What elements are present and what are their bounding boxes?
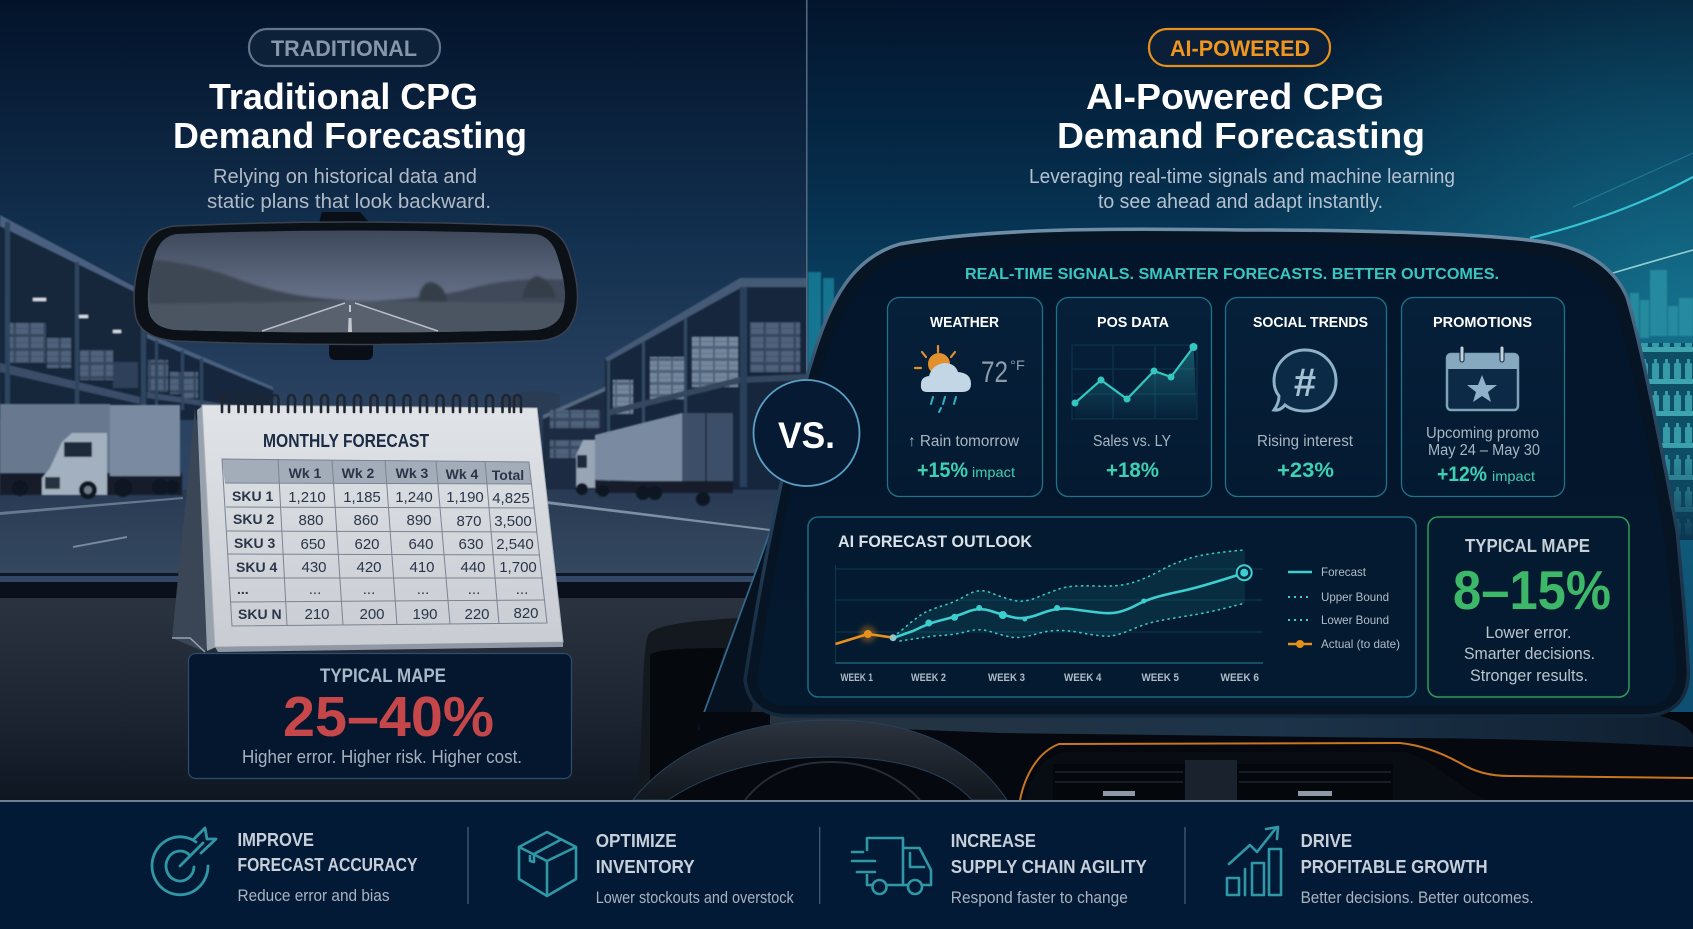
heading: AI-powered [1057, 76, 1425, 156]
panel: social trends card: +23% [1277, 459, 1334, 482]
icon: cardboard box [519, 832, 576, 896]
panel: AI forecast outlook chart: AI FORECAST OUTLOOK [838, 532, 1033, 551]
forecast table: 190 [412, 606, 438, 623]
panel: promotions card [1402, 298, 1564, 496]
spiral rings [222, 395, 521, 412]
forecast table: 440 [460, 559, 486, 576]
callout: traditional MAPE: TYPICAL MAPE [320, 666, 446, 687]
forecast table: ... [516, 581, 528, 598]
windshield pillar [697, 293, 862, 735]
heading: traditional [173, 76, 527, 156]
forecast table: 220 [464, 606, 490, 623]
icon: desk calendar [172, 395, 563, 652]
chart legend: Lower Bound [1321, 613, 1389, 627]
icon: growth bars with arrow [1227, 827, 1281, 895]
forecast table: ... [309, 581, 321, 598]
week labels: WEEK 2 [911, 672, 946, 684]
forecast table: 200 [359, 606, 385, 623]
heading: AI-powered: AI-Powered CPG [1086, 76, 1384, 117]
panel: screen bezel [745, 229, 1688, 716]
badge: AI-powered [1149, 29, 1330, 66]
benefit: improve forecast accuracy: Reduce error and bias [238, 887, 390, 905]
benefit: optimize inventory: INVENTORY [596, 857, 695, 877]
badge: VS [754, 380, 860, 486]
week labels: WEEK 5 [1142, 672, 1179, 684]
panel: traditional background scene [0, 0, 807, 800]
panel: promotions card: +12% [1437, 463, 1487, 486]
chart legend [1288, 565, 1400, 651]
heading: traditional: Demand Forecasting [173, 115, 527, 156]
text block: AI-powered header [1029, 29, 1455, 213]
forecast line [893, 565, 1252, 638]
text block: traditional header [173, 29, 527, 213]
icon: rearview mirror [134, 212, 578, 360]
callout: AI MAPE: Lower error. [1486, 623, 1572, 642]
forecast table: 620 [354, 536, 380, 553]
city skyline [808, 270, 1693, 372]
icon: target with arrow [152, 828, 216, 895]
panel: benefits strip [0, 800, 1693, 929]
subtitle: AI-powered: Leveraging real-time signals and machine learning [1029, 166, 1455, 188]
benefit: improve forecast accuracy [152, 828, 417, 905]
forecast table: 630 [458, 536, 484, 553]
forecast table: 1,185 [343, 489, 381, 506]
panel: weather card: °F [1010, 357, 1025, 373]
benefit: drive profitable growth: DRIVE [1301, 831, 1352, 851]
forecast table: SKU 2 [233, 511, 274, 527]
forecast table: 880 [298, 512, 324, 529]
panel: promotions card: Upcoming promo [1426, 425, 1539, 442]
divider line between panels [806, 0, 808, 380]
callout: AI MAPE: Smarter decisions. [1464, 644, 1595, 663]
panel: POS data card: POS DATA [1097, 314, 1169, 331]
benefit: increase supply chain agility: SUPPLY CHAIN AGILITY [951, 857, 1147, 877]
forecast table: Wk 1 [289, 465, 322, 481]
badge: AI-powered: AI-POWERED [1170, 36, 1310, 61]
benefit: optimize inventory: Lower stockouts and overstock [596, 889, 794, 907]
forecast table: 420 [356, 559, 382, 576]
forecast table: SKU 3 [234, 535, 275, 551]
forecast table: 3,500 [494, 513, 532, 530]
store shelves [1636, 343, 1693, 540]
forecast table [222, 459, 547, 626]
panel: promotions card: PROMOTIONS [1433, 314, 1532, 331]
actual line [836, 626, 897, 644]
chart: POS sales [1072, 343, 1198, 419]
benefit: drive profitable growth: PROFITABLE GROWTH [1301, 857, 1488, 877]
wiper and dashboard [0, 573, 807, 576]
callout: AI MAPE: TYPICAL MAPE [1465, 536, 1590, 556]
forecast table: 820 [513, 605, 539, 622]
chart legend: Forecast [1321, 565, 1367, 579]
forecast table: 650 [300, 536, 326, 553]
calendar stand [172, 405, 216, 652]
subtitle: traditional: Relying on historical data and [213, 166, 477, 188]
air vents [1026, 752, 1485, 800]
subtitle: AI-powered: to see ahead and adapt instantly. [1098, 191, 1383, 213]
forecast table: 1,190 [446, 489, 484, 506]
left warehouse [0, 215, 275, 420]
week labels: WEEK 1 [840, 672, 873, 684]
chart legend: Actual (to date) [1321, 637, 1400, 651]
callout: AI MAPE: 8–15% [1453, 559, 1611, 621]
forecast table: ... [363, 581, 375, 598]
forecast table: 890 [406, 512, 432, 529]
badge: traditional: TRADITIONAL [271, 36, 417, 61]
forecast table: 430 [301, 559, 327, 576]
forecast table: ... [417, 581, 429, 598]
panel: promotions card: May 24 – May 30 [1428, 442, 1540, 459]
forecast table: SKU N [238, 606, 282, 622]
panel: AI forecast outlook chart [808, 517, 1416, 697]
benefit: optimize inventory: OPTIMIZE [596, 831, 677, 851]
week labels: WEEK 4 [1064, 672, 1102, 684]
benefit: increase supply chain agility: INCREASE [951, 831, 1036, 851]
left truck [0, 404, 182, 499]
forecast table: 640 [408, 536, 434, 553]
week labels: WEEK 6 [1220, 672, 1259, 684]
confidence band [893, 550, 1245, 641]
orange trim [1020, 743, 1693, 800]
callout: AI MAPE: Stronger results. [1470, 666, 1588, 685]
calendar page [202, 405, 563, 647]
forecast table: Total [492, 467, 524, 483]
panel: POS data card [1056, 298, 1212, 496]
week labels: WEEK 3 [988, 672, 1025, 684]
calendar heading: MONTHLY FORECAST [263, 431, 429, 451]
panel: weather card: impact [972, 464, 1015, 480]
tagline: REAL-TIME SIGNALS. SMARTER FORECASTS. BETTER OUTCOMES. [965, 266, 1499, 283]
forecast table: 1,700 [499, 559, 537, 576]
forecast table: SKU 4 [236, 559, 277, 575]
benefit: improve forecast accuracy: FORECAST ACCURACY [238, 855, 418, 875]
subtitle: traditional: static plans that look backward. [207, 191, 491, 213]
subtitle: AI-powered [1029, 166, 1455, 213]
benefit: increase supply chain agility: Respond faster to change [951, 889, 1128, 907]
panel: promotions card: impact [1492, 468, 1535, 484]
icon: delivery truck [852, 838, 931, 894]
upper bound line [893, 550, 1245, 637]
forecast table: 1,210 [288, 489, 326, 506]
callout: traditional MAPE [188, 654, 572, 778]
benefit: increase supply chain agility [852, 831, 1147, 907]
temperature: 72 [981, 356, 1008, 389]
forecast table: ... [468, 581, 480, 598]
heading: AI-powered: Demand Forecasting [1057, 115, 1425, 156]
benefit: drive profitable growth [1227, 827, 1534, 907]
panel: social trends card: Rising interest [1257, 433, 1354, 450]
forecast table: SKU 1 [232, 488, 273, 504]
top right light trails [1530, 153, 1693, 273]
road [0, 490, 807, 574]
forecast table: 410 [409, 559, 435, 576]
panel: POS data card: +18% [1106, 459, 1159, 482]
forecast table: Wk 4 [446, 466, 479, 482]
week labels [840, 672, 1259, 684]
dashboard right [700, 712, 1693, 800]
badge: VS: VS. [778, 415, 835, 456]
callout: AI MAPE [1428, 517, 1629, 697]
forecast table: Wk 3 [396, 465, 429, 481]
panel: weather card: WEATHER [930, 314, 999, 331]
callout: traditional MAPE: Higher error. Higher risk. Higher cost. [242, 746, 522, 767]
benefit: drive profitable growth: Better decisions. Better outcomes. [1301, 889, 1534, 907]
forecast table: 1,240 [395, 489, 433, 506]
right warehouses [543, 278, 807, 490]
benefit: optimize inventory [519, 831, 794, 907]
panel: weather card: +15% [917, 459, 968, 482]
forecast table: 870 [456, 513, 482, 530]
panel: weather card [888, 298, 1042, 496]
mirror glass scene [148, 230, 565, 332]
lower bound line [900, 603, 1245, 641]
icon: promo calendar with star [1447, 346, 1518, 410]
badge: traditional [249, 29, 440, 66]
panel: POS data card: Sales vs. LY [1093, 433, 1171, 450]
heading: traditional: Traditional CPG [209, 76, 478, 117]
icon: hashtag speech bubble: # [1294, 361, 1316, 405]
forecast table: 2,540 [496, 536, 534, 553]
panel: AI-powered background scene [807, 0, 1693, 800]
benefit: improve forecast accuracy: IMPROVE [238, 830, 314, 850]
panel: social trends card: SOCIAL TRENDS [1253, 314, 1368, 331]
subtitle: traditional [207, 166, 491, 213]
chart axes and grid [836, 565, 1263, 663]
chart legend: Upper Bound [1321, 590, 1389, 604]
forecast table: Wk 2 [342, 465, 375, 481]
forecast table: 4,825 [492, 490, 530, 507]
panel: social trends card [1226, 298, 1386, 496]
icon: steering wheel [633, 720, 1007, 800]
forecast table: 210 [304, 606, 330, 623]
callout: traditional MAPE: 25–40% [283, 685, 494, 749]
right truck [576, 413, 733, 506]
forecast table: 860 [353, 512, 379, 529]
icon: hashtag speech bubble [1274, 350, 1336, 411]
icon: sun and rain cloud [915, 346, 971, 412]
panel: weather card: ↑ Rain tomorrow [908, 433, 1020, 450]
forecast table: ... [237, 581, 249, 597]
